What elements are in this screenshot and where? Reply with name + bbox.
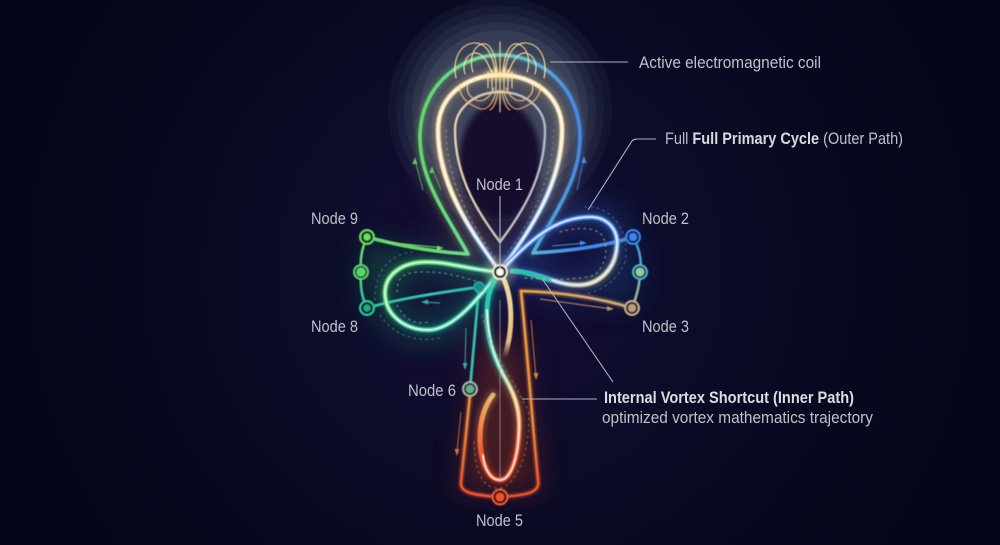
outer path: full primary cycle [361,55,641,497]
label: node 3: Node 3 [642,317,689,336]
node: 2 [626,230,640,244]
right petal [500,217,617,285]
S-curve vortex [480,272,519,480]
leader: outer path [588,139,656,210]
label: coil: Active electromagnetic coil [639,53,821,72]
label: node 9: Node 9 [311,209,358,228]
halo around coil [388,0,612,222]
node: inner junction [474,282,484,292]
leader: vortex [522,398,597,400]
label: node 1: Node 1 [476,175,523,194]
node: right middle [633,265,647,279]
node: 9 [360,230,374,244]
leader: node 1 [499,196,501,268]
dotted flow trails [375,130,626,488]
left petal [385,262,500,330]
label: outer path: Full Full Primary Cycle (Outer Path) [665,129,903,148]
label: inner path: Internal Vortex Shortcut (Inner Path) [604,388,854,407]
label: inner path description: optimized vortex mathematics trajectory [602,408,873,427]
label: node 6: Node 6 [408,381,456,400]
node: left middle [354,265,368,279]
coil field lines [455,42,545,112]
flow arrows [386,156,614,456]
label: node 2: Node 2 [642,209,689,228]
faint vertical axis [499,300,501,482]
node: 3 [625,301,639,315]
inner teardrop [455,92,545,242]
leader: coil [550,61,628,63]
cream lower strand [500,272,511,356]
node: 8 [360,301,374,315]
inner loop dark centre [460,102,540,218]
main inner loop [438,75,562,272]
label: node 5: Node 5 [476,511,523,530]
node: center [480,252,520,292]
leader: inner path [543,280,613,382]
ankh ambient glow [361,75,640,492]
node: 6 [463,382,477,396]
coil glow [484,70,516,80]
node: 5 [492,490,508,504]
label: node 8: Node 8 [311,317,358,336]
